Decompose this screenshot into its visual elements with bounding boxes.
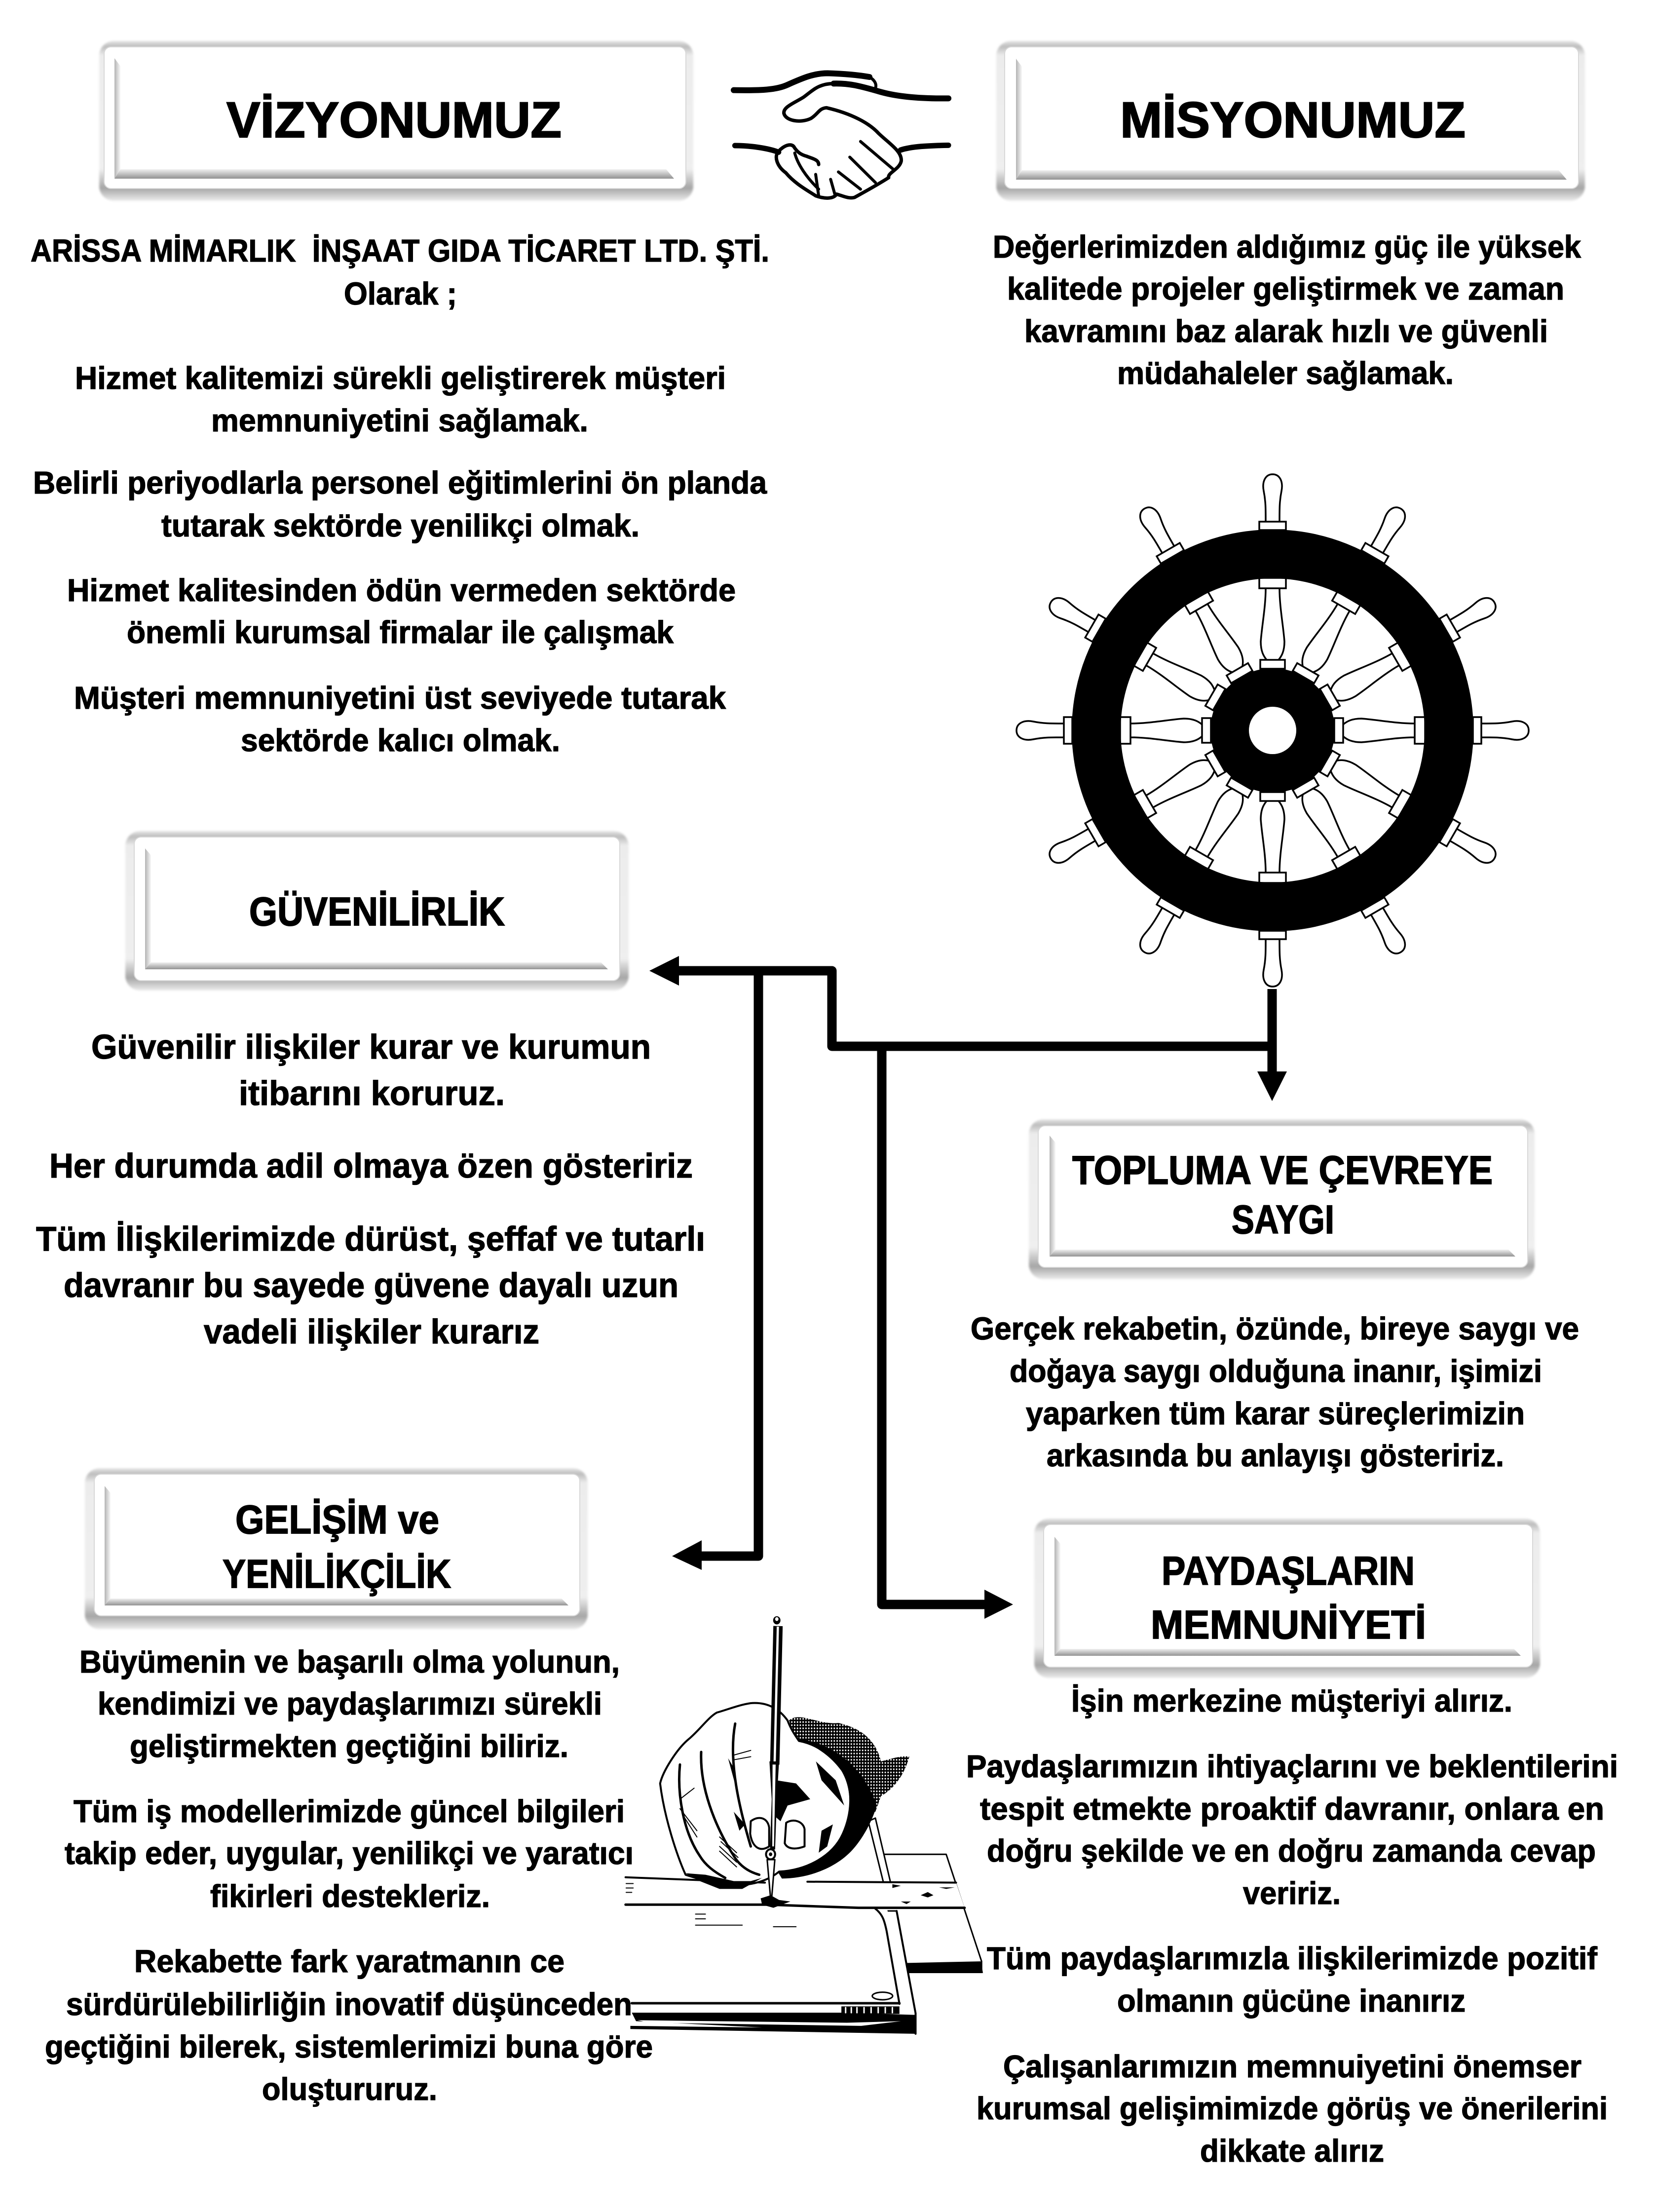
panel: paydaşların memnuniyeti heading box: [1034, 1519, 1540, 1678]
text block: paydaşların memnuniyeti description: Tüm paydaşlarımızla ilişkilerimizde pozitif: [987, 1941, 1598, 1976]
text block: güvenilirlik description: Tüm İlişkilerimizde dürüst, şeffaf ve tutarlı: [36, 1220, 705, 1258]
text block: güvenilirlik description: Güvenilir ilişkiler kurar ve kurumun: [91, 1028, 651, 1066]
text block: paydaşların memnuniyeti description: İşin merkezine müşteriyi alırız.: [1071, 1683, 1512, 1718]
panel: gelişim ve yenilikçilik heading box: [85, 1468, 588, 1629]
text block: gelişim ve yenilikçilik description: Tüm iş modellerimizde güncel bilgileri: [74, 1793, 625, 1829]
text block: vision statement: Belirli periyodlarla personel eğitimlerini ön planda: [33, 465, 767, 500]
text block: gelişim ve yenilikçilik description: kendimizi ve paydaşlarımızı sürekli: [98, 1686, 602, 1721]
text block: paydaşların memnuniyeti description: veririz.: [1243, 1875, 1341, 1911]
text block: mission statement: kalitede projeler geliştirmek ve zaman: [1007, 271, 1564, 306]
heading: paydaşların memnuniyeti: MEMNUNİYETİ: [1151, 1602, 1426, 1647]
panel: vizyonumuz heading box: [99, 41, 693, 201]
heading: paydaşların memnuniyeti: PAYDAŞLARIN: [1162, 1549, 1415, 1594]
icon: hand drawing with compass on drafting board: [626, 1616, 983, 2034]
text block: mission statement: müdahaleler sağlamak.: [1117, 355, 1454, 391]
text block: paydaşların memnuniyeti description: dikkate alırız: [1200, 2133, 1384, 2169]
text block: güvenilirlik description: [36, 1028, 705, 1351]
text block: vision statement: Hizmet kalitesinden ödün vermeden sektörde: [67, 572, 736, 608]
text block: güvenilirlik description: vadeli ilişkiler kurarız: [204, 1312, 539, 1351]
text block: gelişim ve yenilikçilik description: takip eder, uygular, yenilikçi ve yaratıcı: [65, 1835, 634, 1871]
text block: paydaşların memnuniyeti description: kurumsal gelişimimizde görüş ve önerilerini: [977, 2091, 1608, 2126]
text block: paydaşların memnuniyeti description: Çalışanlarımızın memnuiyetini önemser: [1003, 2049, 1581, 2084]
text block: gelişim ve yenilikçilik description: geliştirmekten geçtiğini biliriz.: [130, 1728, 568, 1764]
text block: vision statement: Hizmet kalitemizi sürekli geliştirerek müşteri: [75, 360, 726, 396]
icon: handshake: [734, 73, 948, 198]
text block: topluma ve çevreye saygı description: doğaya saygı olduğuna inanır, işimizi: [1010, 1353, 1542, 1389]
panel: misyonumuz heading box: [996, 41, 1585, 201]
text block: gelişim ve yenilikçilik description: oluştururuz.: [262, 2071, 437, 2107]
text block: paydaşların memnuniyeti description: Paydaşlarımızın ihtiyaçlarını ve beklentilerini: [966, 1749, 1618, 1784]
arrows: connector tree from wheel to values: [649, 956, 1287, 1619]
panel: güvenilirlik heading box: [125, 831, 629, 991]
heading: topluma ve çevreye saygı: SAYGI: [1232, 1197, 1334, 1242]
text block: paydaşların memnuniyeti description: tespit etmekte proaktif davranır, onlara en: [980, 1791, 1604, 1827]
text block: mission statement: [993, 229, 1581, 391]
icon: ship wheel: [1016, 474, 1529, 987]
text block: topluma ve çevreye saygı description: Gerçek rekabetin, özünde, bireye saygı ve: [971, 1311, 1579, 1346]
heading: misyonumuz: MİSYONUMUZ: [1120, 92, 1466, 148]
heading: güvenilirlik: GÜVENİLİRLİK: [249, 889, 505, 934]
text block: vision statement: memnuniyetini sağlamak.: [211, 403, 588, 438]
heading: paydaşların memnuniyeti: [1151, 1549, 1426, 1647]
text block: vision statement: Olarak ;: [344, 276, 457, 311]
text block: paydaşların memnuniyeti description: olmanın gücüne inanırız: [1117, 1983, 1466, 2019]
text block: gelişim ve yenilikçilik description: geçtiğini bilerek, sistemlerimizi buna göre: [45, 2029, 653, 2064]
heading: topluma ve çevreye saygı: TOPLUMA VE ÇEVREYE: [1072, 1148, 1493, 1193]
text block: mission statement: Değerlerimizden aldığımız güç ile yüksek: [993, 229, 1581, 265]
text block: vision statement: Müşteri memnuniyetini üst seviyede tutarak: [74, 680, 726, 716]
heading: gelişim ve yenilikçilik: GELİŞİM ve: [235, 1497, 439, 1542]
text block: gelişim ve yenilikçilik description: fikirleri destekleriz.: [210, 1878, 490, 1914]
text block: topluma ve çevreye saygı description: yaparken tüm karar süreçlerimizin: [1026, 1396, 1525, 1431]
text block: gelişim ve yenilikçilik description: Rekabette fark yaratmanın ce: [134, 1944, 565, 1979]
text block: vision statement: ARİSSA MİMARLIK İNŞAAT GIDA TİCARET LTD. ŞTİ.: [31, 233, 769, 268]
heading: gelişim ve yenilikçilik: YENİLİKÇİLİK: [223, 1552, 451, 1597]
text block: vision statement: tutarak sektörde yenilikçi olmak.: [161, 508, 640, 543]
text block: gelişim ve yenilikçilik description: sürdürülebilirliğin inovatif düşünceden: [66, 1986, 632, 2022]
text block: gelişim ve yenilikçilik description: Büyümenin ve başarılı olma yolunun,: [79, 1644, 620, 1679]
text block: paydaşların memnuniyeti description: [966, 1683, 1618, 2169]
text block: topluma ve çevreye saygı description: [971, 1311, 1579, 1473]
text block: gelişim ve yenilikçilik description: [45, 1644, 653, 2107]
text block: güvenilirlik description: davranır bu sayede güvene dayalı uzun: [64, 1266, 678, 1304]
text block: güvenilirlik description: itibarını koruruz.: [239, 1074, 505, 1112]
heading: topluma ve çevreye saygı: [1072, 1148, 1493, 1242]
text block: paydaşların memnuniyeti description: doğru şekilde ve en doğru zamanda cevap: [987, 1833, 1596, 1869]
heading: gelişim ve yenilikçilik: [223, 1497, 451, 1597]
text block: topluma ve çevreye saygı description: arkasında bu anlayışı gösteririz.: [1047, 1438, 1504, 1473]
text block: vision statement: önemli kurumsal firmalar ile çalışmak: [127, 614, 674, 650]
text block: mission statement: kavramını baz alarak hızlı ve güvenli: [1024, 313, 1548, 349]
text block: güvenilirlik description: Her durumda adil olmaya özen gösteririz: [49, 1146, 693, 1185]
text block: vision statement: [31, 233, 769, 758]
panel: topluma ve çevreye saygı heading box: [1029, 1119, 1535, 1279]
text block: vision statement: sektörde kalıcı olmak.: [241, 723, 560, 758]
heading: vizyonumuz: VİZYONUMUZ: [226, 92, 562, 148]
